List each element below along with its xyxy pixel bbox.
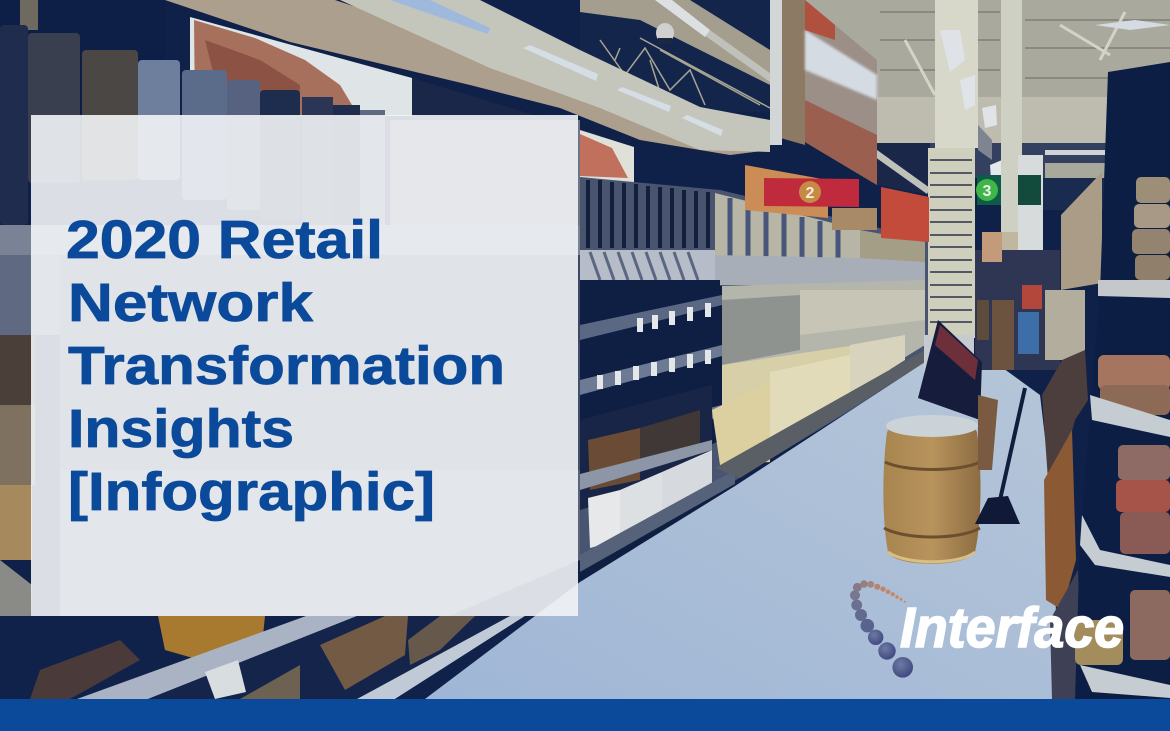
- wooden barrel: [883, 415, 981, 564]
- logo wordmark: Interface: [900, 596, 1124, 660]
- title: 2020 Retail: [66, 210, 383, 270]
- logo beads: [850, 580, 913, 678]
- ceiling right: [580, 0, 1170, 210]
- hanging banner: [770, 0, 877, 185]
- main pillar with slats: [924, 0, 978, 385]
- shelves centre: [580, 177, 930, 582]
- red aisle sign 2: [745, 165, 929, 242]
- far aisle merchandise: [975, 172, 1102, 370]
- floor: [425, 355, 1060, 699]
- display stand and broom: [918, 320, 1025, 524]
- candy jars: [0, 25, 580, 240]
- red meat poster: [580, 130, 634, 185]
- title: Network: [68, 273, 314, 333]
- translucent title panel: [31, 115, 578, 616]
- back signs: green sign 3: [976, 0, 1043, 290]
- right aisle bags: [1042, 350, 1088, 699]
- title: Transformation: [68, 336, 505, 396]
- left shelf contents: [0, 225, 580, 680]
- title: [Infographic]: [68, 462, 435, 522]
- top left dark wall and pizza poster: [0, 0, 600, 150]
- back signs: green sign 3: 3: [983, 183, 992, 200]
- Interface logo: [850, 580, 1124, 678]
- truss area: [580, 0, 770, 112]
- ceiling spot lights: [940, 30, 1002, 195]
- lower left basket rail and tubs: [0, 616, 560, 699]
- right dark fixture with food tubs: [1075, 62, 1170, 699]
- red aisle sign 2: 2: [806, 185, 815, 202]
- title: Insights: [68, 399, 294, 459]
- title: [66, 210, 505, 522]
- bottom blue bar: [0, 699, 1170, 731]
- soffit with ceiling lights: [165, 0, 930, 194]
